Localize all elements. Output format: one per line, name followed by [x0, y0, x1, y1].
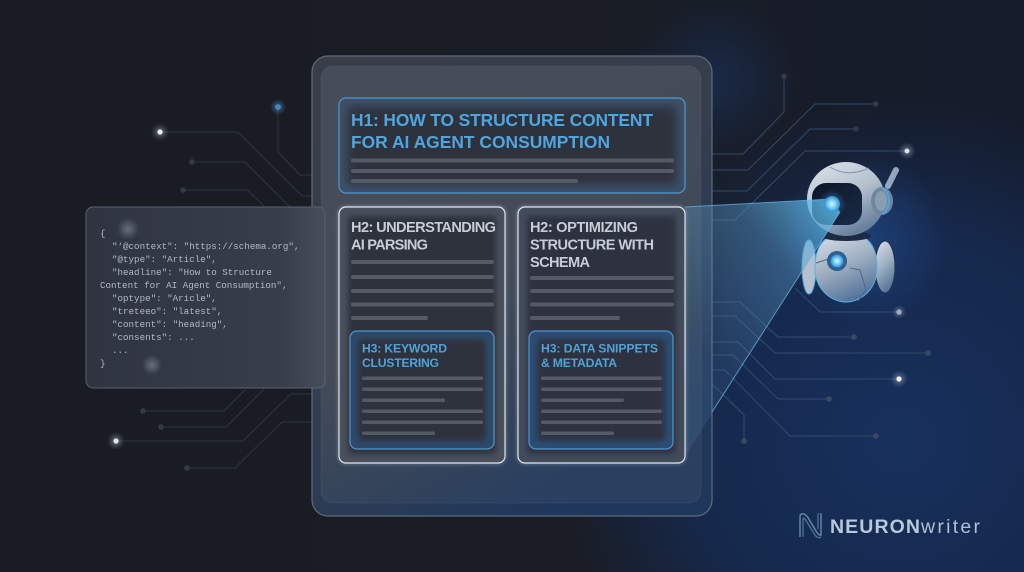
JSON code text — [100, 228, 299, 369]
robot neck shadow — [821, 231, 871, 241]
H2 card: optimizing structure with schema — [518, 207, 685, 463]
JSON code text: "headline": "How to Structure — [112, 267, 272, 278]
H2 card: understanding AI parsing — [339, 207, 505, 463]
JSON code text: "@type": "Article", — [112, 254, 217, 265]
JSON code text: } — [100, 358, 106, 369]
H3 card: data snippets and metadata — [529, 331, 673, 449]
H3 card: data snippets and metadata: H3: DATA SNIPPETS — [541, 342, 658, 356]
NEURONwriter logo — [800, 513, 980, 538]
H2 heading: AI PARSING — [351, 238, 428, 254]
H3 card: keyword clustering: H3: KEYWORD — [362, 342, 447, 356]
logo wordmark: NEURON — [830, 516, 920, 538]
robot left arm — [802, 240, 816, 294]
H1 text lines — [351, 158, 674, 183]
JSON code text: "optype": "Aricle", — [112, 293, 217, 304]
JSON-LD code panel — [86, 207, 325, 388]
tablet panel — [312, 56, 712, 516]
H1 heading — [351, 110, 653, 152]
JSON code text: "treteeo": "latest", — [112, 306, 222, 317]
robot ear — [871, 187, 893, 215]
JSON code text: "‘@context": "https://schema.org", — [112, 241, 299, 252]
H2 heading: H2: UNDERSTANDING — [351, 220, 496, 236]
circuit lines left — [107, 99, 312, 471]
H3 card: keyword clustering: CLUSTERING — [362, 356, 439, 370]
H2 heading — [530, 220, 654, 271]
H1 card — [339, 98, 685, 193]
H1 heading: H1: HOW TO STRUCTURE CONTENT — [351, 110, 653, 130]
JSON code text: "content": "heading", — [112, 319, 228, 330]
JSON code text: Content for AI Agent Consumption", — [100, 280, 287, 291]
light beam from robot eye — [685, 199, 840, 456]
robot right arm — [875, 241, 895, 293]
circuit lines right — [712, 73, 931, 444]
H2 heading: H2: OPTIMIZING — [530, 220, 638, 236]
JSON code text: ... — [112, 345, 129, 356]
icon: robot — [802, 162, 896, 302]
JSON code text: "consents": ... — [112, 332, 195, 343]
logo wordmark: writer — [920, 516, 980, 538]
robot eye — [818, 190, 846, 218]
H2 heading: SCHEMA — [530, 255, 590, 271]
H3 card: keyword clustering — [350, 331, 494, 449]
robot visor — [812, 183, 862, 225]
robot antenna — [888, 170, 896, 186]
robot chest light — [827, 251, 847, 271]
H2 heading: STRUCTURE WITH — [530, 238, 654, 254]
robot head — [807, 162, 885, 236]
H2 heading — [351, 220, 496, 254]
H1 heading: FOR AI AGENT CONSUMPTION — [351, 132, 610, 152]
robot body — [815, 233, 877, 302]
H2 text lines — [530, 276, 674, 320]
H2 text lines — [351, 260, 494, 320]
logo icon — [800, 513, 821, 538]
H3 card: data snippets and metadata: & METADATA — [541, 356, 617, 370]
JSON code text: { — [100, 228, 106, 239]
